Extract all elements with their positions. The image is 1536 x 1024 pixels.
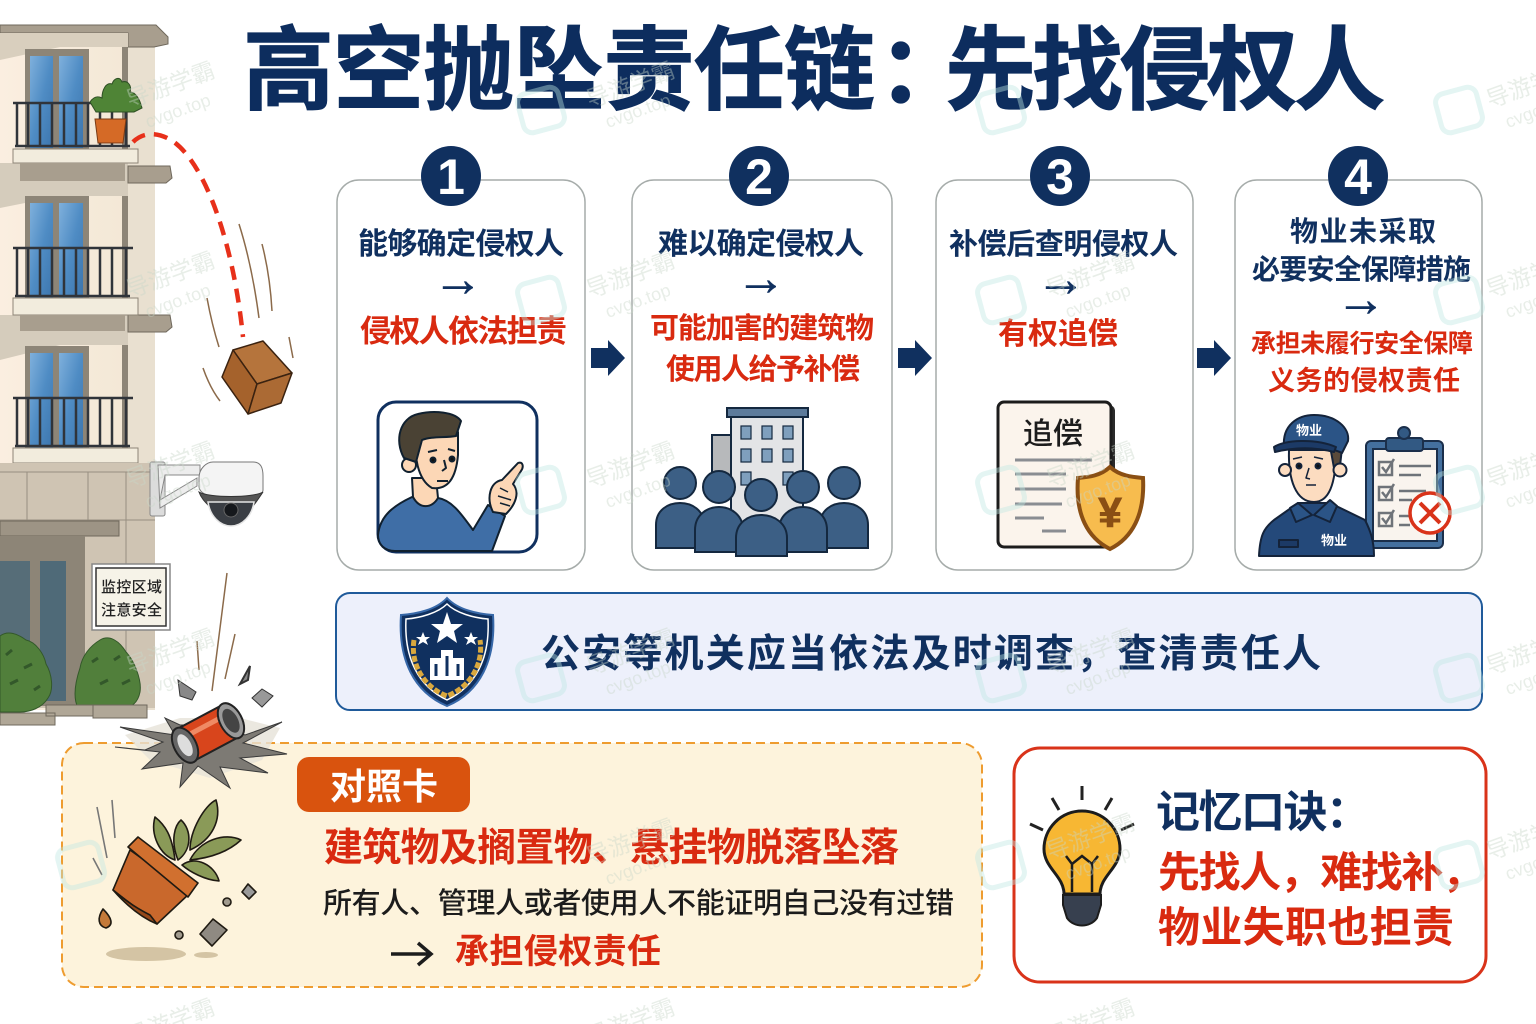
watermarks: cvgo.top — [1062, 280, 1133, 322]
watermarks: 导游学霸 — [123, 57, 218, 113]
icon: clipboard with failed checks — [1366, 427, 1450, 548]
comparison card tag — [297, 757, 470, 812]
watermarks: 导游学霸 — [123, 624, 218, 680]
balcony floor 3 — [13, 346, 138, 463]
investigation banner — [336, 593, 1482, 710]
watermarks: 导游学霸 — [583, 57, 678, 113]
watermarks: cvgo.top — [142, 470, 213, 512]
arrow 3 to 4 — [1197, 340, 1231, 376]
title: ： — [878, 21, 969, 122]
camera — [150, 462, 263, 526]
badge 3: 3 — [1046, 149, 1074, 205]
comparison card heading: 建筑物及搁置物、悬挂物脱落坠落 — [324, 827, 899, 870]
watermarks: 导游学霸 — [1043, 437, 1138, 493]
badge 2 — [729, 146, 789, 206]
watermarks: cvgo.top — [142, 657, 213, 699]
watermarks: 导游学霸 — [123, 437, 218, 493]
card 3 condition: 补偿后查明侵权人 — [949, 228, 1178, 261]
card 3 result: 有权追偿 — [998, 318, 1118, 351]
arrow 2 to 3 — [898, 340, 932, 376]
card 4 result: 义务的侵权责任 — [1268, 366, 1460, 396]
badge 2: 2 — [745, 149, 773, 205]
icon: property guard: 物业 — [1321, 533, 1347, 548]
falling flowerpot — [93, 800, 256, 961]
comparison card result: 承担侵权责任 — [455, 933, 661, 971]
card 4 — [1235, 146, 1482, 570]
monitoring sign: 监控区域 — [101, 579, 162, 596]
watermarks: 导游学霸 — [1043, 809, 1138, 865]
card 4 arrow: → — [1336, 271, 1386, 327]
icon: light bulb — [1030, 786, 1134, 926]
icon: recovery document with shield: 追偿 — [1023, 418, 1083, 451]
watermarks: cvgo.top — [602, 847, 673, 889]
card 4 condition: 必要安全保障措施 — [1252, 254, 1471, 285]
comparison card tag: 对照卡 — [330, 766, 438, 807]
card 4 condition — [1252, 216, 1471, 285]
card 2 result — [650, 312, 874, 386]
badge 4: 4 — [1344, 149, 1372, 205]
badge 1: 1 — [437, 149, 465, 205]
watermarks: 导游学霸 — [583, 624, 678, 680]
card 2 result: 可能加害的建筑物 — [650, 312, 874, 345]
title: 高空抛坠责任链 — [243, 21, 875, 122]
watermarks: cvgo.top — [142, 280, 213, 322]
watermarks: cvgo.top — [602, 90, 673, 132]
memory tip rhyme — [1158, 849, 1484, 951]
badge 1 — [421, 146, 481, 206]
card 3 arrow: → — [1036, 251, 1086, 307]
monitoring sign — [92, 564, 170, 630]
red can — [166, 699, 250, 767]
ground floor — [0, 463, 155, 725]
falling box — [203, 224, 293, 414]
icon: building and crowd — [656, 408, 868, 556]
icon: police badge — [401, 598, 493, 706]
building illustration — [0, 25, 172, 725]
watermarks: cvgo.top — [142, 90, 213, 132]
card 4 result: 承担未履行安全保障 — [1251, 330, 1473, 358]
watermarks: 导游学霸 — [1043, 247, 1138, 303]
watermarks: cvgo.top — [1062, 657, 1133, 699]
memory tip panel — [1014, 748, 1486, 982]
title — [243, 21, 1385, 122]
watermarks: cvgo.top — [602, 470, 673, 512]
watermarks: cvgo.top — [602, 657, 673, 699]
memory tip rhyme: 物业失职也担责 — [1158, 904, 1454, 951]
card 2 — [632, 146, 892, 570]
title: 先找侵权人 — [945, 21, 1385, 122]
card 2 result: 使用人给予补偿 — [666, 353, 860, 386]
falling trajectory — [133, 134, 243, 337]
memory tip heading: 记忆口诀： — [1156, 788, 1370, 837]
card 4 result — [1251, 330, 1473, 396]
watermarks: cvgo.top — [1062, 470, 1133, 512]
card 1 condition: 能够确定侵权人 — [358, 228, 564, 261]
icon: recovery document with shield: ¥ — [1098, 489, 1122, 536]
comparison card body: 所有人、管理人或者使用人不能证明自己没有过错 — [323, 887, 954, 920]
card 1 arrow: → — [433, 251, 483, 307]
badge 4 — [1328, 146, 1388, 206]
icon: recovery document with shield — [998, 402, 1143, 549]
card 2 arrow: → — [736, 250, 786, 306]
watermarks: 导游学霸 — [1043, 624, 1138, 680]
impact crater with fallen can — [115, 573, 287, 788]
icon: person pointing — [378, 402, 537, 552]
icon: property guard: 物业 — [1296, 423, 1322, 438]
watermarks: cvgo.top — [1062, 842, 1133, 884]
icon: property guard — [1259, 415, 1374, 556]
balcony floor 2 — [13, 196, 138, 331]
watermarks: 导游学霸 — [583, 814, 678, 870]
card 2 condition: 难以确定侵权人 — [658, 228, 864, 261]
arrow 1 to 2 — [591, 340, 625, 376]
watermarks: 导游学霸 — [583, 437, 678, 493]
banner text: 公安等机关应当依法及时调查，查清责任人 — [541, 633, 1321, 676]
card 4 condition: 物业未采取 — [1290, 216, 1436, 247]
memory tip rhyme: 先找人，难找补， — [1158, 849, 1484, 896]
balcony floor 1 — [13, 49, 142, 181]
monitoring sign: 注意安全 — [101, 601, 162, 619]
badge 3 — [1030, 146, 1090, 206]
watermarks: 导游学霸 — [123, 247, 218, 303]
card 3 — [936, 146, 1193, 570]
watermarks: cvgo.top — [602, 280, 673, 322]
comparison card background — [62, 743, 982, 987]
watermarks: 导游学霸 — [583, 247, 678, 303]
card 1 — [337, 146, 585, 570]
card 1 result: 侵权人依法担责 — [360, 314, 567, 349]
